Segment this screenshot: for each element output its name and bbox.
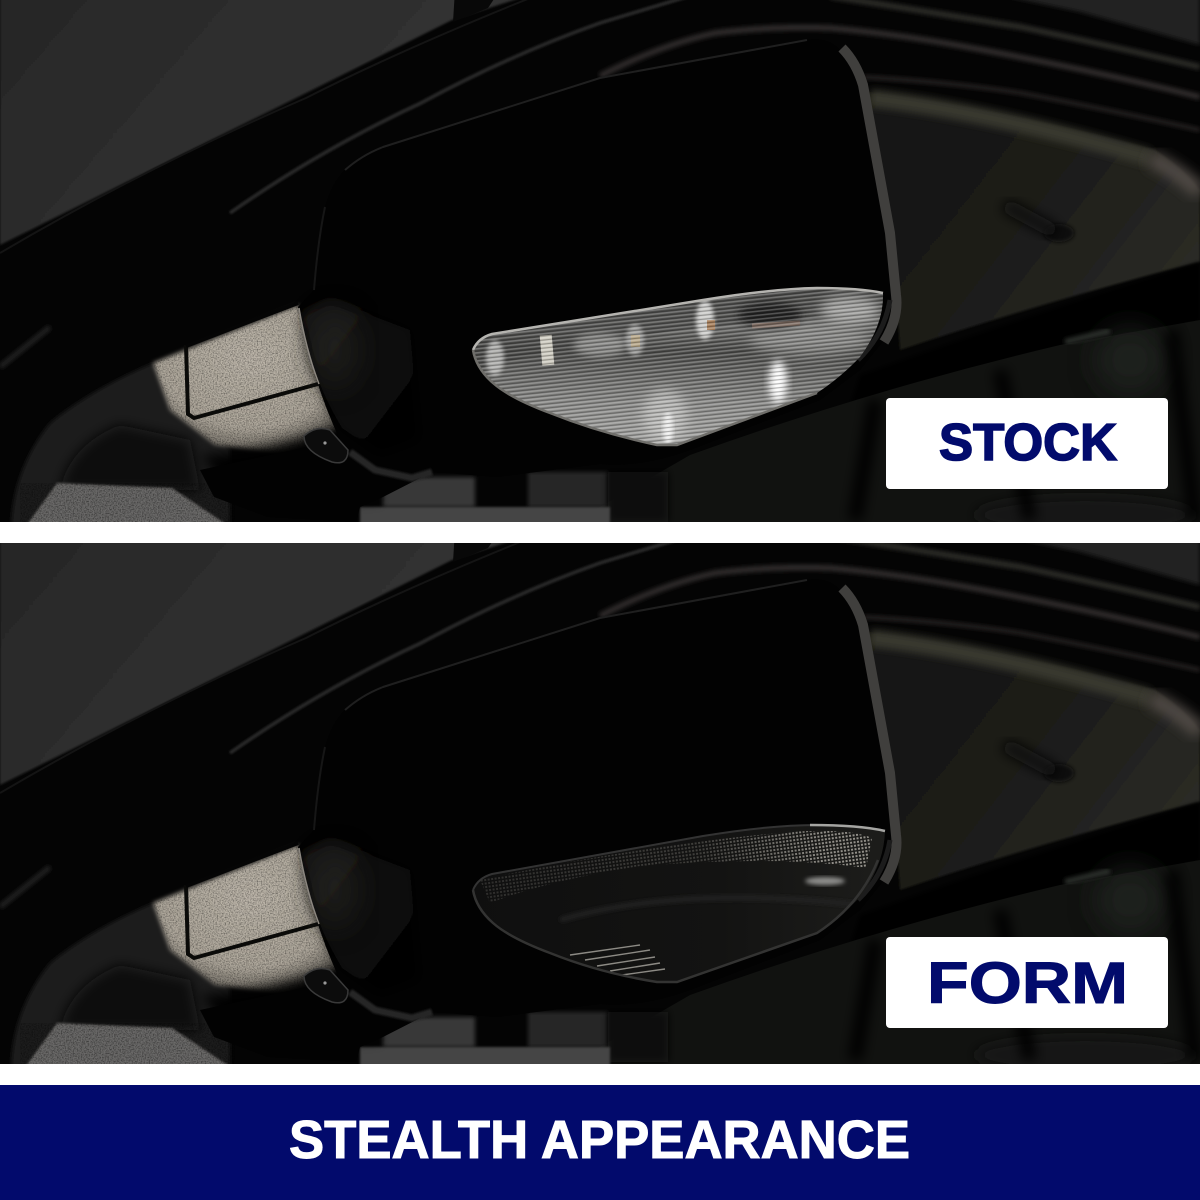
banner: stealth appearance: STEALTH APPEARANCE xyxy=(289,1110,910,1170)
label: stock: STOCK xyxy=(939,414,1117,472)
label: form xyxy=(886,937,1168,1028)
stock clear mirror lens xyxy=(465,280,890,450)
smoked form mirror lens xyxy=(472,824,886,984)
panel: stock photo xyxy=(0,0,1200,533)
label: stock xyxy=(886,398,1168,489)
label: form: FORM xyxy=(927,951,1128,1016)
panel: form photo xyxy=(0,530,1200,1073)
banner: stealth appearance xyxy=(0,1085,1200,1200)
